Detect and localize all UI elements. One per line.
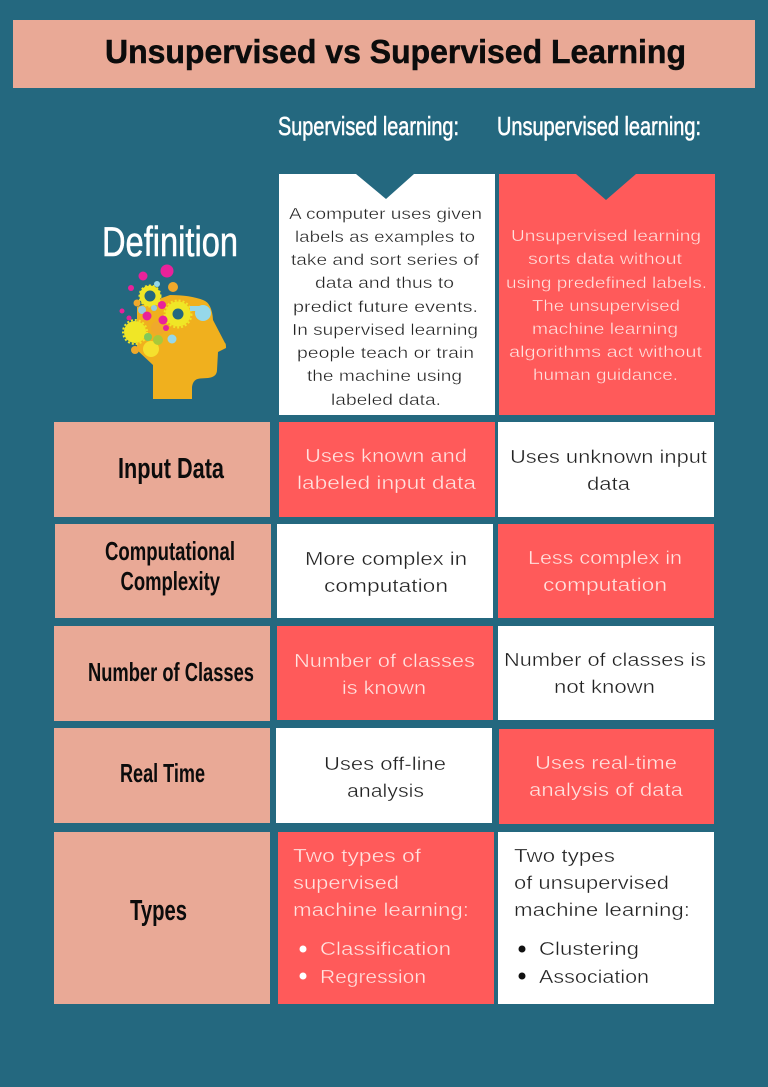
cell: supervised complexity: computation [324,575,448,596]
panel: unsupervised definition: sorts data without [528,251,683,268]
cell: unsupervised input data [498,422,714,517]
panel: supervised definition [279,174,495,415]
cell: supervised types: Regression [320,966,426,987]
column heading: unsupervised: Unsupervised learning: [497,111,701,141]
title banner: Unsupervised vs Supervised Learning [105,33,686,70]
cell: unsupervised complexity: computation [543,574,667,595]
cell: unsupervised input data: data [587,473,631,494]
cell: supervised types: machine learning: [293,899,469,920]
panel: supervised definition: the machine using [307,368,462,385]
panel: supervised definition: people teach or train [297,345,474,362]
cell: supervised real time: analysis [347,780,424,801]
cell: unsupervised real time [499,729,714,824]
icon: head with gears [120,264,226,399]
panel: supervised definition: A computer uses given [289,206,482,223]
row label: real time [54,728,270,823]
cell: supervised input data: labeled input data [297,472,477,493]
row label: types: Types [130,895,187,927]
cell: unsupervised real time: analysis of data [529,779,684,800]
heading: definition: Definition [102,218,238,265]
row label: input data [54,422,270,517]
panel: unsupervised definition [499,174,715,415]
panel: supervised definition: In supervised learning [292,322,478,339]
cell: supervised complexity [277,524,493,618]
cell: supervised types [278,832,494,1004]
cell: unsupervised types: Two types [514,845,615,866]
panel: unsupervised definition: algorithms act without [509,344,703,361]
cell: unsupervised classes [498,626,714,720]
panel: supervised definition: data and thus to [315,275,454,292]
panel: unsupervised definition: human guidance. [533,367,678,384]
title banner [13,20,755,88]
row label: computational complexity: Complexity [120,566,220,596]
cell: unsupervised complexity [498,524,714,618]
cell: supervised types: supervised [293,872,399,893]
panel: supervised definition: labels as examples to [295,229,475,246]
cell: unsupervised input data: Uses unknown input [510,446,707,467]
cell: supervised classes [277,626,493,720]
cell: supervised input data: Uses known and [305,445,467,466]
column heading: supervised: Supervised learning: [278,111,459,141]
panel: unsupervised definition: machine learning [532,321,678,338]
panel: supervised definition: predict future events. [293,299,478,316]
cell: supervised types: Classification [320,938,451,959]
cell: supervised input data [279,422,495,517]
panel: unsupervised definition: The unsupervised [532,298,680,315]
cell: supervised classes: Number of classes [294,650,475,671]
cell: supervised complexity: More complex in [305,548,467,569]
cell: unsupervised types [498,832,714,1004]
panel: unsupervised definition: Unsupervised learning [511,228,701,245]
row label: computational complexity [55,524,271,618]
panel: supervised definition: take and sort series of [291,252,480,269]
cell: unsupervised types: Clustering [539,938,639,959]
row label: types [54,832,270,1004]
row label: number of classes: Number of Classes [88,657,254,687]
cell: unsupervised types: Association [539,966,649,987]
panel: unsupervised definition: using predefined labels. [506,275,707,292]
cell: unsupervised types: machine learning: [514,899,690,920]
cell: unsupervised real time: Uses real-time [535,752,677,773]
row label: real time: Real Time [120,758,205,788]
cell: unsupervised complexity: Less complex in [528,547,682,568]
cell: supervised real time: Uses off-line [324,753,446,774]
row label: input data: Input Data [118,453,225,485]
cell: unsupervised types: of unsupervised [514,872,669,893]
row label: computational complexity: Computational [105,536,235,566]
panel: supervised definition: labeled data. [331,392,441,409]
row label: number of classes [54,626,270,721]
cell: supervised types: Two types of [293,845,422,866]
cell: supervised real time [276,728,492,823]
cell: unsupervised classes: not known [554,676,655,697]
cell: supervised classes: is known [342,677,426,698]
cell: unsupervised classes: Number of classes is [504,649,706,670]
